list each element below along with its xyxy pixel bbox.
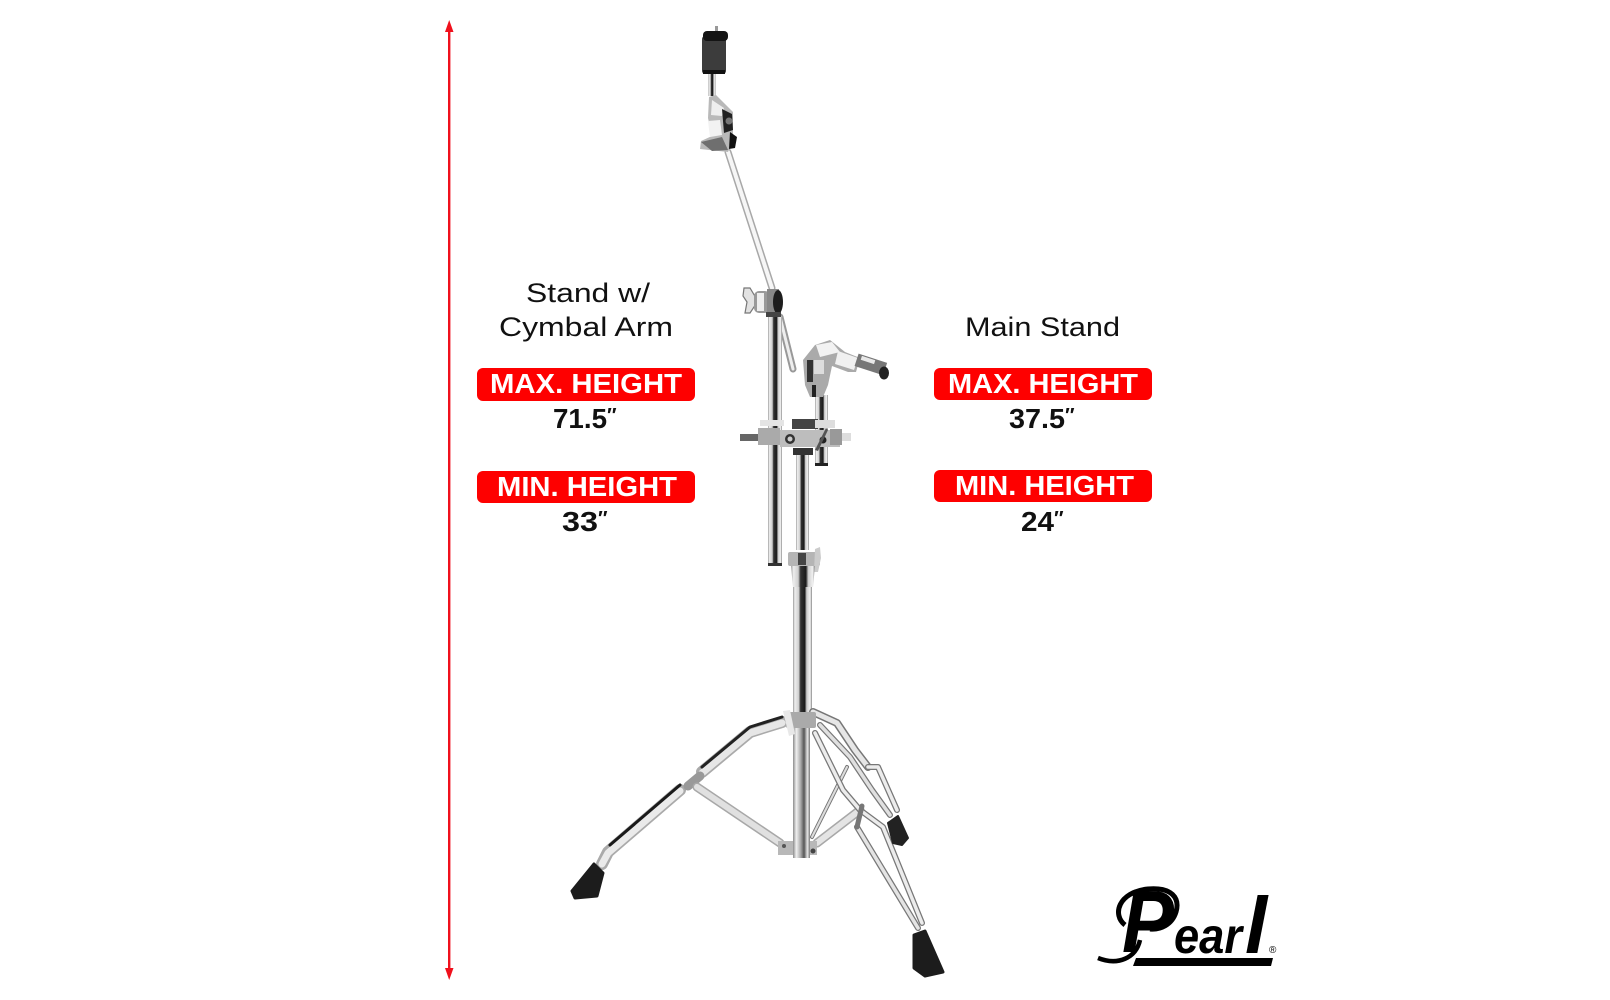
leg collar — [783, 710, 816, 736]
multi clamp — [740, 419, 851, 455]
main tube lower — [793, 587, 812, 712]
logo: Pearl — [1098, 872, 1277, 971]
rubber foot: back — [888, 816, 908, 845]
logo wordmark: P — [1122, 872, 1174, 971]
logo swash — [1119, 889, 1177, 929]
value: max height: 37.5 — [1009, 403, 1065, 434]
value: max height: ″ — [1065, 405, 1075, 427]
cymbal arm — [728, 152, 793, 369]
rubber foot: right — [914, 931, 943, 976]
value: min height: ″ — [598, 508, 608, 530]
right strut — [817, 810, 860, 843]
value: min height: ″ — [1054, 508, 1064, 530]
badge: max height: MAX. HEIGHT — [490, 368, 682, 399]
value: min height: 24 — [1021, 506, 1054, 537]
heading: stand with cymbal arm — [499, 278, 673, 342]
short post — [815, 395, 828, 465]
tom holder — [803, 340, 889, 397]
panel: main stand specs — [934, 312, 1152, 537]
badge: max height: MAX. HEIGHT — [948, 368, 1138, 399]
arm clamp and wing nut — [743, 288, 783, 317]
cymbal felt and tilter — [700, 26, 737, 152]
height arrow — [445, 20, 454, 980]
badge: min height: MIN. HEIGHT — [955, 470, 1134, 501]
value: min height — [562, 506, 608, 537]
tripod base — [602, 712, 922, 928]
logo wordmark: ear — [1174, 908, 1244, 964]
left leg — [602, 717, 782, 864]
value: max height: ″ — [607, 405, 617, 427]
value: max height: 71.5 — [553, 403, 607, 434]
right leg — [815, 733, 922, 928]
back leg — [813, 712, 897, 815]
logo underline — [1133, 958, 1273, 966]
logo registered mark: ® — [1269, 945, 1277, 956]
logo swash tail — [1098, 940, 1140, 961]
heading: stand with cymbal arm: Stand w/ — [526, 278, 651, 308]
left strut — [697, 787, 780, 843]
badge: min height: MIN. HEIGHT — [497, 471, 677, 502]
main post upper — [796, 453, 809, 550]
rubber foot: left — [572, 864, 603, 898]
heading: main stand: Main Stand — [965, 312, 1120, 342]
cymbal post — [768, 317, 782, 565]
logo wordmark: l — [1245, 881, 1269, 970]
logo wordmark — [1122, 872, 1269, 971]
thin brace — [812, 767, 847, 837]
hub — [778, 840, 817, 858]
heading: stand with cymbal arm: Cymbal Arm — [499, 312, 673, 342]
value: min height: 33 — [562, 506, 598, 537]
panel: stand with cymbal arm specs — [477, 278, 695, 537]
height clamp — [788, 547, 821, 587]
illustration: cymbal stand — [572, 26, 943, 976]
